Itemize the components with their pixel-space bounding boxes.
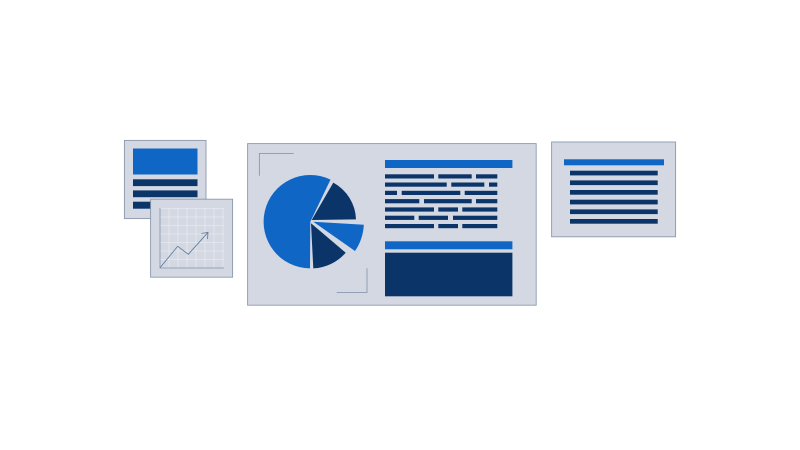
chart axes — [160, 208, 224, 268]
text block heading bar — [385, 160, 512, 168]
chart grid — [160, 208, 224, 268]
panel: main dashboard — [248, 144, 536, 305]
pie slice: blue offset — [313, 222, 364, 251]
lower dark block — [385, 253, 512, 296]
text block lines — [385, 174, 497, 228]
text card heading bar — [564, 159, 664, 165]
pie slice: dark upper — [312, 183, 356, 220]
document text lines — [133, 179, 198, 209]
text card lines — [570, 171, 658, 224]
document image block — [133, 148, 198, 174]
pie slice: large blue — [264, 175, 330, 268]
lower block heading bar — [385, 241, 512, 249]
corner bracket top left — [259, 153, 294, 176]
pie chart — [264, 175, 364, 268]
panel: text card — [552, 142, 676, 237]
panel: document card — [124, 140, 206, 219]
corner bracket bottom right — [337, 268, 367, 292]
pie slice: dark lower — [311, 223, 346, 268]
panel: line chart card — [151, 199, 233, 277]
chart trend arrow — [160, 232, 208, 268]
